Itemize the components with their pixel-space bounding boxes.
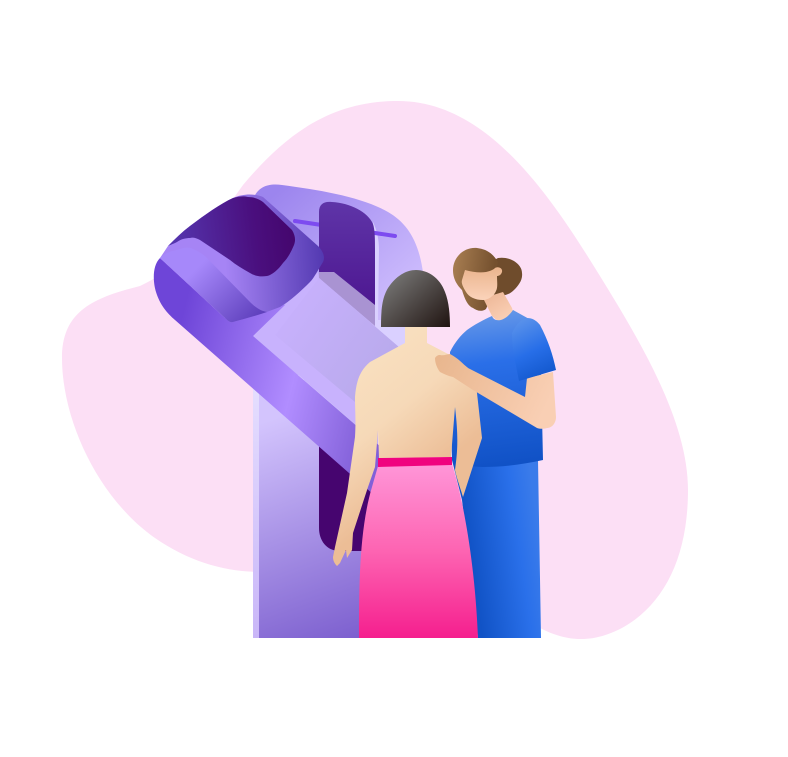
mammography machine: [154, 185, 425, 638]
machine head: [253, 185, 425, 400]
nurse hair: [453, 248, 498, 311]
patient back and arms: [333, 325, 482, 566]
lower dark panel: [319, 430, 375, 551]
shadow on panel: [319, 272, 375, 326]
patient: [333, 270, 482, 638]
machine column: [253, 375, 378, 638]
compression paddle outer: [160, 194, 324, 322]
patient waistband: [378, 457, 452, 467]
nurse sleeve: [512, 318, 556, 381]
nurse face: [462, 267, 502, 300]
nurse arm: [435, 354, 556, 429]
patient skirt: [359, 464, 478, 638]
nurse trousers: [452, 460, 541, 638]
dark vertical panel: [319, 202, 375, 310]
light back plate: [340, 222, 405, 420]
nurse hair bun: [480, 258, 522, 296]
angled arm: [154, 258, 382, 502]
patient hair: [381, 270, 450, 327]
purple rod: [295, 221, 395, 236]
nurse arm and sleeve: [435, 318, 556, 429]
nurse body: [450, 248, 543, 638]
paddle fold: [160, 248, 267, 322]
nurse shirt: [450, 310, 543, 467]
paddle dark window: [168, 196, 295, 276]
nurse neck: [483, 292, 513, 323]
compression plate: [275, 278, 400, 440]
pink background blob: [62, 101, 688, 639]
compression plate rim: [253, 272, 400, 440]
